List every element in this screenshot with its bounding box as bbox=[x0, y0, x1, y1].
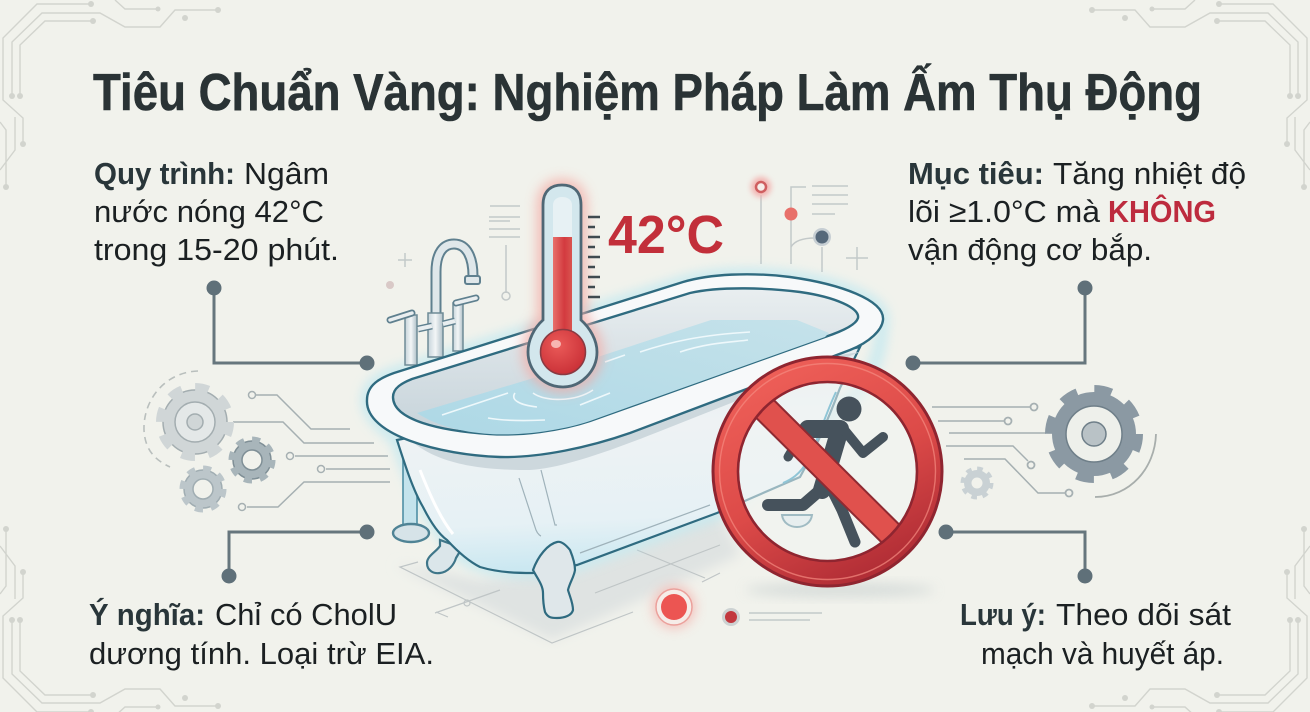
tub inner bbox=[393, 288, 858, 434]
icon: status dots top bbox=[386, 177, 831, 289]
text block: lưu ý: Lưu ý: bbox=[960, 597, 1046, 632]
text block: mục tiêu: lõi ≥1.0°C mà bbox=[908, 194, 1101, 229]
back right foot bbox=[782, 515, 812, 527]
text block: quy trình bbox=[94, 156, 339, 267]
connector: top left bbox=[206, 280, 374, 370]
text block: ý nghĩa: dương tính. Loại trừ EIA. bbox=[89, 636, 434, 671]
medium gear bbox=[232, 440, 272, 480]
runner bbox=[768, 396, 883, 542]
tub rim bbox=[367, 274, 883, 457]
water bbox=[417, 320, 829, 434]
thermometer bulb bbox=[540, 330, 586, 374]
water ripples bbox=[442, 332, 750, 421]
decorative tech marks around tub bbox=[398, 186, 868, 300]
thermometer ticks bbox=[588, 217, 600, 297]
text block: mục tiêu: Mục tiêu: bbox=[908, 156, 1044, 191]
prohibition bar bbox=[757, 401, 898, 541]
tub glow bbox=[367, 274, 883, 572]
text block: quy trình: Ngâm bbox=[244, 156, 329, 191]
text block: ý nghĩa: Ý nghĩa: bbox=[89, 597, 205, 632]
text block: ý nghĩa bbox=[89, 597, 434, 671]
text block: quy trình: trong 15-20 phút. bbox=[94, 232, 339, 267]
floor grid bbox=[400, 545, 720, 643]
big gear bbox=[162, 389, 228, 455]
corner circuit: bottom right bbox=[1089, 526, 1310, 712]
text block: mục tiêu: vận động cơ bắp. bbox=[908, 232, 1152, 267]
corner circuit: top left bbox=[0, 0, 221, 190]
sign interior bbox=[738, 382, 918, 562]
sign shadow bbox=[745, 583, 935, 597]
thermometer body bbox=[528, 185, 597, 387]
text block: mục tiêu: KHÔNG bbox=[1108, 193, 1216, 229]
icon: thermometer bbox=[528, 185, 600, 387]
tub under-rim band bbox=[400, 352, 860, 470]
claw foot bbox=[533, 542, 575, 618]
tub body details bbox=[420, 470, 710, 553]
text block: quy trình: nước nóng 42°C bbox=[94, 194, 324, 229]
thermometer tube bbox=[553, 197, 572, 237]
corner circuit: top right bbox=[1089, 0, 1310, 190]
connector: bottom left bbox=[222, 524, 374, 584]
temperature label: 42°C bbox=[608, 205, 724, 265]
back leg curve behind sign bbox=[783, 392, 836, 483]
small gear bbox=[963, 469, 991, 497]
text block: ý nghĩa: Chỉ có CholU bbox=[215, 597, 397, 632]
connector: bottom right bbox=[938, 524, 1092, 584]
text block: lưu ý bbox=[960, 597, 1231, 671]
back leg bbox=[427, 540, 462, 573]
text block: lưu ý: mạch và huyết áp. bbox=[981, 636, 1224, 671]
text block: quy trình: Quy trình: bbox=[94, 156, 235, 191]
floor shadow bbox=[395, 515, 740, 640]
text block: mục tiêu bbox=[908, 156, 1246, 267]
icon: bottom status dots bbox=[653, 586, 822, 628]
prohibition ring bbox=[713, 357, 942, 586]
corner circuit: bottom left bbox=[0, 526, 221, 712]
icon: no exercise sign bbox=[713, 357, 942, 586]
floor pipe bbox=[393, 460, 429, 542]
faucet bbox=[390, 244, 480, 365]
tub body bbox=[397, 347, 860, 573]
big gear bbox=[1052, 392, 1136, 476]
connector: top right bbox=[906, 280, 1092, 370]
text block: mục tiêu: Tăng nhiệt độ bbox=[1053, 156, 1246, 191]
small gear bbox=[183, 469, 223, 509]
thermometer glow bbox=[528, 185, 597, 387]
icon: right gears bbox=[932, 392, 1156, 497]
icon: bathtub bbox=[367, 244, 883, 618]
icon: left gears bbox=[144, 371, 390, 510]
text block: lưu ý: Theo dõi sát bbox=[1056, 597, 1231, 632]
